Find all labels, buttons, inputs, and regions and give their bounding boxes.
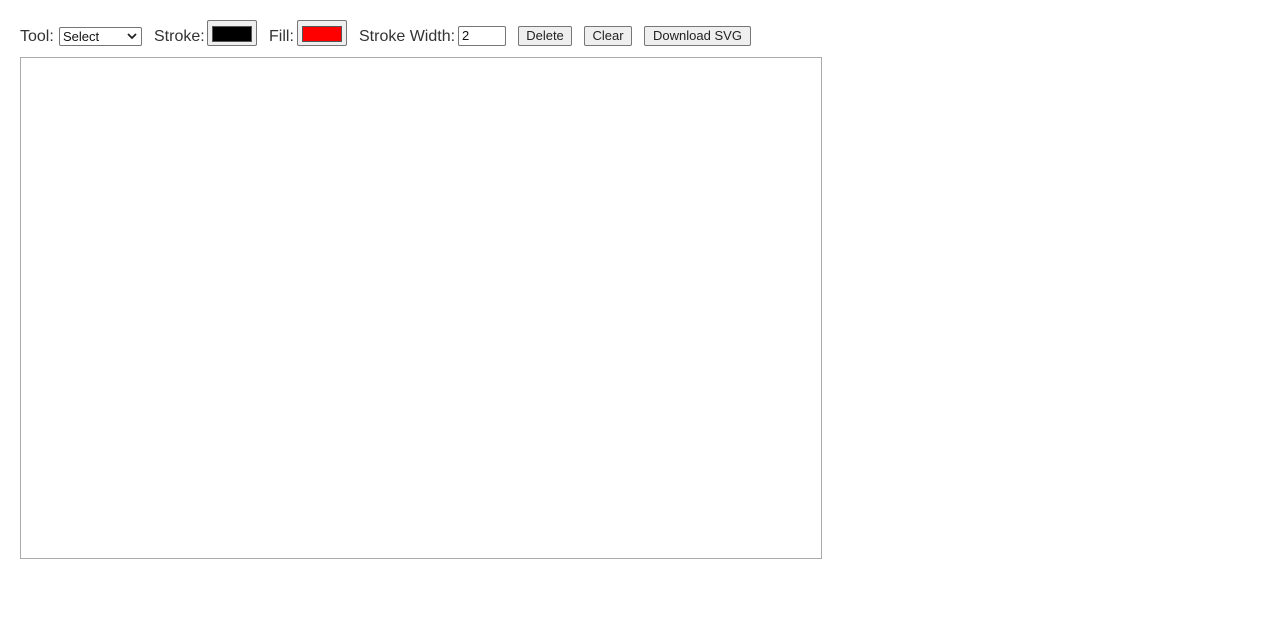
label: tool: Tool: bbox=[20, 28, 54, 45]
button: clear bbox=[584, 26, 632, 46]
canvas bbox=[20, 57, 822, 559]
button: download svg bbox=[644, 26, 751, 46]
button: delete bbox=[518, 26, 572, 46]
button: delete: Delete bbox=[526, 28, 564, 43]
toolbar bbox=[20, 20, 751, 46]
label: stroke width: Stroke Width: bbox=[359, 28, 455, 45]
select: tool: Select bbox=[63, 29, 99, 44]
input: stroke width bbox=[458, 26, 506, 46]
select: tool bbox=[59, 27, 142, 46]
label: fill: Fill: bbox=[269, 28, 294, 45]
button: download svg: Download SVG bbox=[653, 28, 742, 43]
swatch: fill color bbox=[297, 20, 347, 46]
swatch: stroke color bbox=[207, 20, 257, 46]
button: clear: Clear bbox=[592, 28, 624, 43]
input: stroke width: 2 bbox=[462, 28, 469, 43]
label: stroke: Stroke: bbox=[154, 28, 205, 45]
